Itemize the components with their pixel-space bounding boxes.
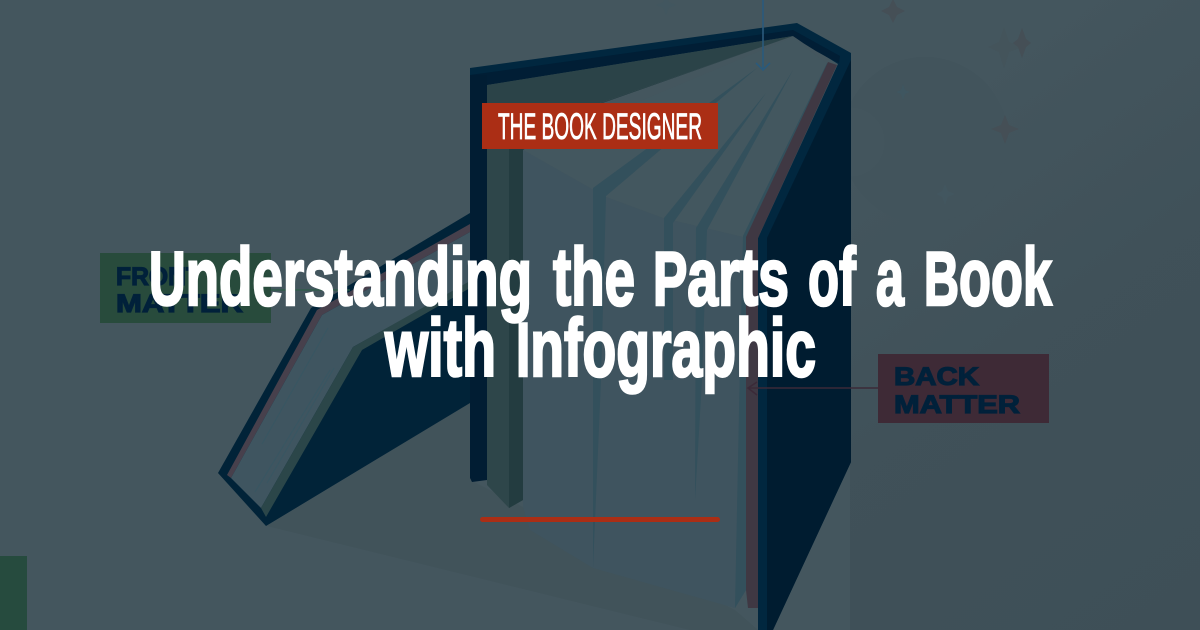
label: back matter: BACK [894, 363, 979, 391]
label: front matter [100, 253, 350, 323]
divider line [480, 517, 720, 522]
arrow: top pointer [756, 0, 770, 70]
page section stripes [593, 68, 757, 568]
title: with [384, 303, 496, 394]
green page edge [261, 281, 470, 517]
label: front matter: MATTER [116, 290, 243, 318]
front cover of open book [218, 213, 470, 526]
page block [523, 37, 837, 608]
back matter pink edge [746, 62, 837, 608]
bottom-left green block [0, 556, 27, 630]
title: Infographic [516, 303, 816, 394]
label: back matter: MATTER [894, 391, 1020, 419]
title: the [553, 232, 635, 323]
brand badge: THE BOOK DESIGNER [498, 106, 702, 147]
decorative stars [656, 0, 1031, 205]
arrow: back matter pointer [748, 382, 878, 395]
back cover [470, 23, 851, 630]
title: Parts [653, 232, 789, 323]
page lines [255, 328, 334, 492]
label: front matter: FRONT [116, 263, 201, 291]
brand badge [482, 103, 718, 149]
left board column [470, 75, 487, 482]
front pages [231, 232, 470, 508]
green fan and front page block [487, 36, 793, 508]
label: back matter [878, 354, 1049, 423]
title: of [808, 232, 856, 323]
title: Understanding [149, 232, 532, 323]
title: Book [924, 232, 1052, 323]
right board panel [767, 60, 851, 630]
title: a [876, 232, 905, 323]
front matter pink page edge [227, 224, 470, 478]
title [149, 232, 1052, 394]
